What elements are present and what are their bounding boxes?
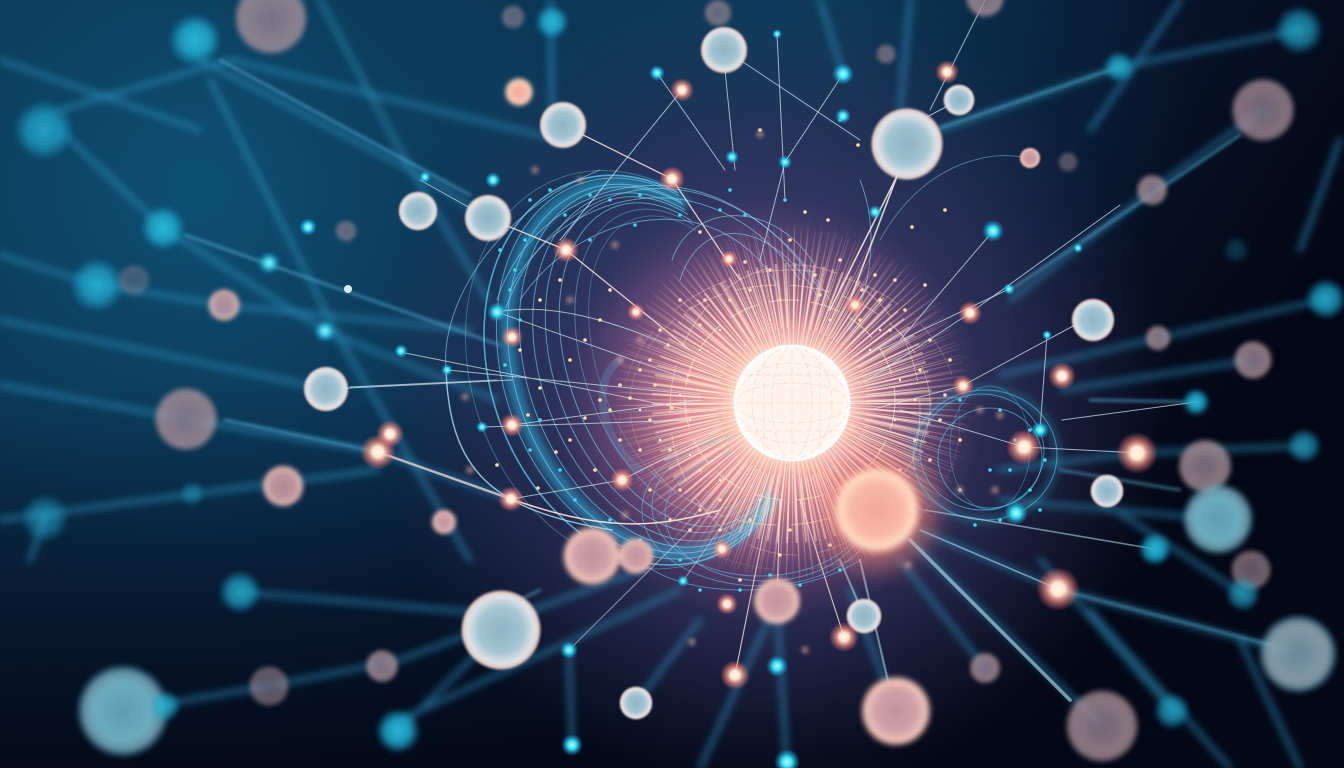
sphere cluster: lower centre: [561, 0, 1005, 748]
central wireframe globe: [704, 315, 880, 491]
right ring: [913, 386, 1057, 520]
glowing pink nodes: [360, 60, 1158, 690]
central pink glow: [555, 195, 985, 625]
swirling wire rings: [411, 140, 1057, 616]
sphere cluster: right: [1058, 5, 1344, 764]
sharp connection lines: [330, 0, 1196, 700]
large left ring glow: [458, 161, 796, 593]
lower ring: [603, 360, 878, 590]
upper arcs: [446, 156, 1030, 530]
semi-focused bright connection lines: [185, 60, 1290, 650]
glowing cyan nodes: [299, 29, 1083, 768]
small light particles: [465, 120, 1045, 650]
sphere cluster: upper left: [13, 0, 569, 342]
large left ring: [411, 140, 802, 616]
radiating rays and curved filaments: [620, 265, 960, 570]
sphere cluster: lower left: [20, 386, 457, 759]
large bright foreground sphere: [817, 450, 937, 570]
focused glass spheres: [303, 26, 1124, 720]
